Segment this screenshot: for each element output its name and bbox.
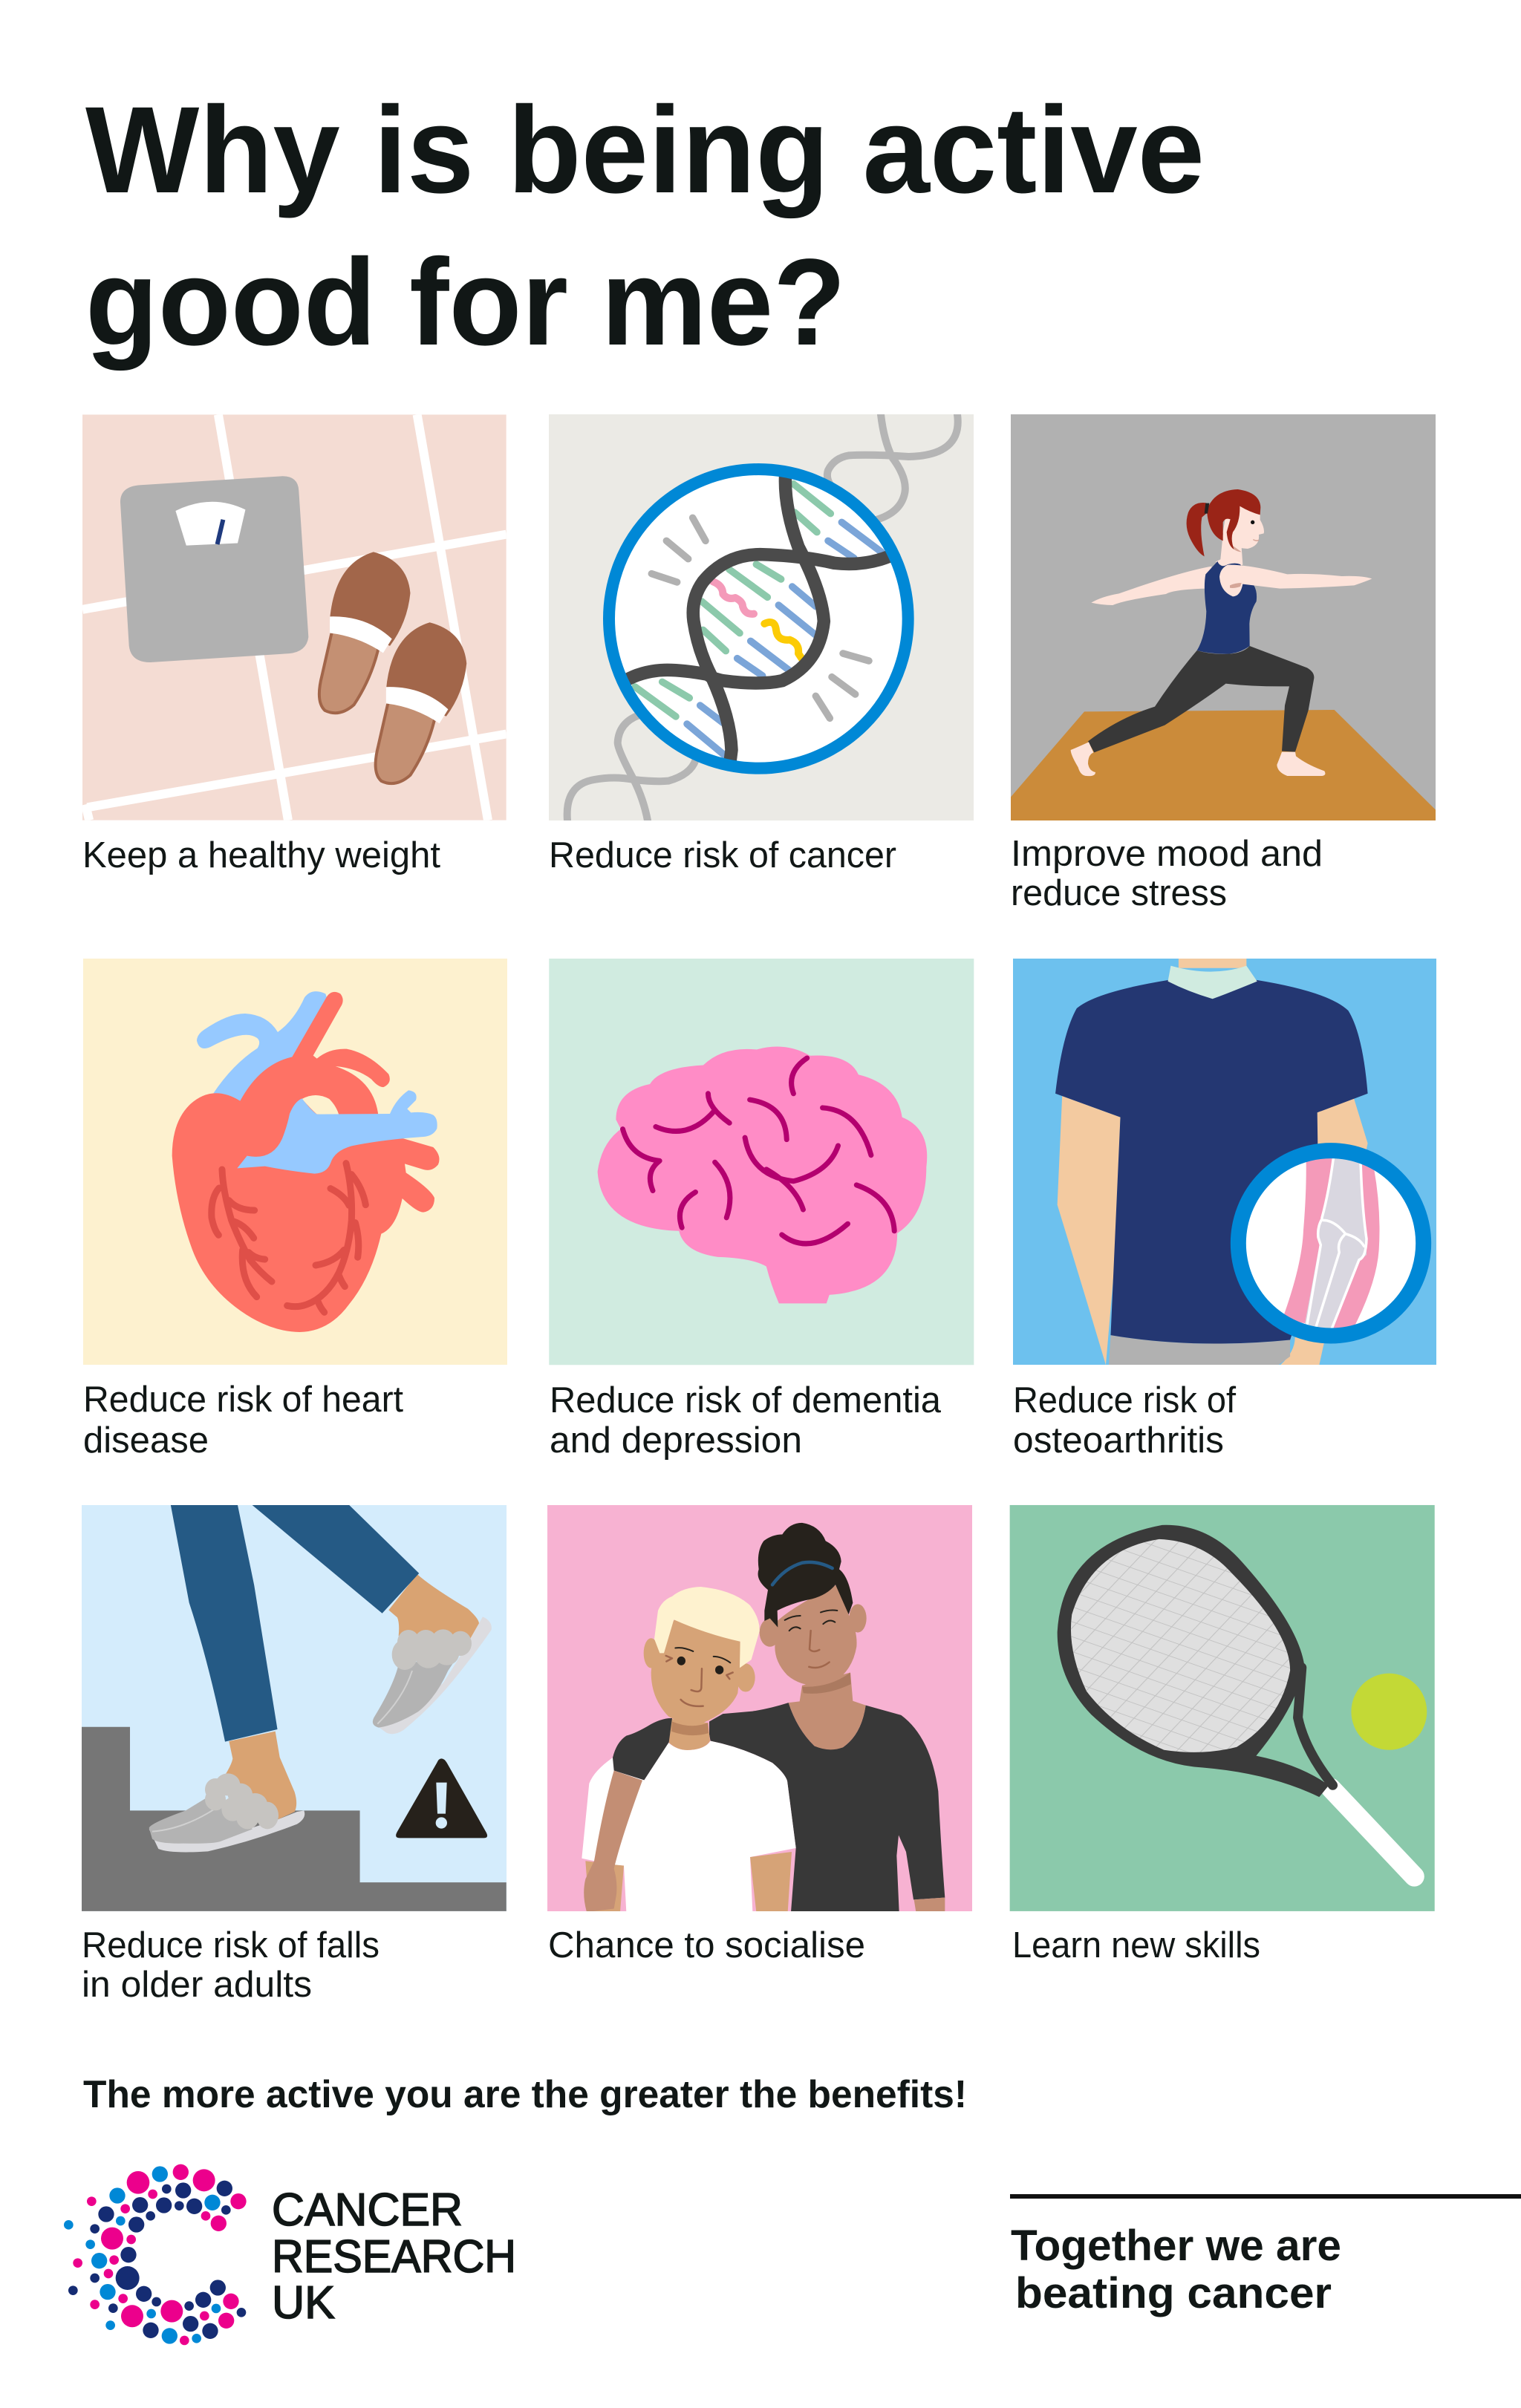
- caption: falls: in older adults: [82, 1965, 312, 2005]
- caption: falls: Reduce risk of falls: [82, 1925, 380, 1965]
- stairs: [82, 1727, 507, 1911]
- panel: new skills: [1010, 1505, 1435, 1911]
- divider rule: [1010, 2194, 1521, 2199]
- panel: keep a healthy weight: [82, 414, 507, 820]
- figure: yoga woman: [1071, 489, 1372, 776]
- icon: slippers: [319, 552, 466, 783]
- title: good for me?: [85, 234, 846, 371]
- caption: reduce risk of cancer: Reduce risk of cancer: [549, 835, 896, 875]
- caption: dementia and depression: and depression: [550, 1420, 802, 1461]
- caption: dementia and depression: [550, 1380, 942, 1461]
- icon: dotted C: [64, 2164, 247, 2345]
- caption: heart disease: disease: [83, 1420, 209, 1461]
- panel: socialise: [547, 1505, 972, 1912]
- caption: falls: [82, 1925, 380, 2005]
- tagline: beating cancer: [1015, 2269, 1332, 2317]
- logo: Cancer Research UK: [64, 2164, 516, 2345]
- legs and slippers: [149, 1505, 492, 1852]
- panel: falls: [82, 1505, 507, 1911]
- icon: brain: [598, 1047, 927, 1303]
- caption: heart disease: Reduce risk of heart: [83, 1380, 403, 1420]
- magnifier with DNA: [609, 468, 908, 770]
- icon: bathroom scale: [120, 476, 308, 662]
- caption: dementia and depression: Reduce risk of dementia: [550, 1380, 942, 1420]
- caption: keep a healthy weight: Keep a healthy weight: [82, 835, 440, 875]
- caption: new skills: Learn new skills: [1012, 1925, 1260, 1965]
- logo wordmark: UK: [272, 2277, 335, 2329]
- logo wordmark: RESEARCH: [272, 2231, 516, 2283]
- tagline: Together we are: [1011, 2222, 1341, 2270]
- icon: tennis ball: [1351, 1674, 1427, 1750]
- logo wordmark: [272, 2185, 516, 2329]
- panel: heart disease: [83, 959, 507, 1365]
- panel: reduce risk of cancer: [549, 414, 974, 820]
- figure: torso and arms: [1055, 959, 1368, 1365]
- caption: socialise: Chance to socialise: [548, 1925, 865, 1965]
- caption: improve mood and reduce stress: Improve mood and: [1011, 834, 1323, 874]
- figure: woman: [709, 1523, 945, 1912]
- panel: improve mood: [1011, 414, 1436, 820]
- caption: heart disease: [83, 1380, 403, 1461]
- panel: dementia and depression: [549, 959, 974, 1365]
- icon: tennis racket: [1058, 1525, 1414, 1876]
- caption: improve mood and reduce stress: [1011, 834, 1323, 913]
- tagline: [1011, 2222, 1341, 2317]
- caption: osteoarthritis: Reduce risk of: [1013, 1380, 1236, 1420]
- logo wordmark: CANCER: [272, 2185, 463, 2236]
- figure: woman's arm: [584, 1718, 672, 1912]
- icon: warning triangle: [396, 1758, 487, 1838]
- caption: osteoarthritis: [1013, 1380, 1236, 1461]
- panel: osteoarthritis: [1013, 959, 1436, 1365]
- caption: osteoarthritis: osteoarthritis: [1013, 1420, 1224, 1461]
- callout: benefits: The more active you are the greater the benefits!: [83, 2073, 967, 2116]
- magnifier: knee joint: [1238, 1151, 1424, 1336]
- icon: heart: [172, 991, 439, 1332]
- title: [85, 82, 1205, 371]
- caption: improve mood and reduce stress: reduce stress: [1011, 873, 1227, 913]
- yoga mat: [1011, 710, 1436, 820]
- title: Why is being active: [85, 82, 1205, 219]
- figure: man: [582, 1587, 796, 1912]
